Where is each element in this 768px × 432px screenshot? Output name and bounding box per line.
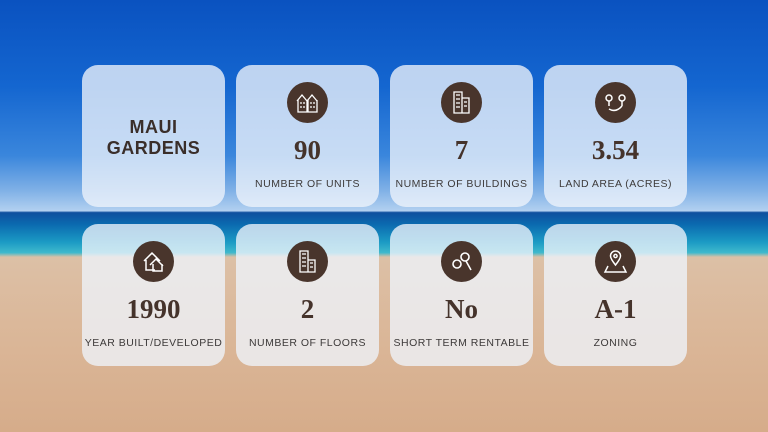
card: land area — [544, 65, 687, 207]
icon: map pins — [595, 82, 636, 123]
card: short term rentable — [390, 224, 533, 366]
title — [107, 117, 200, 158]
title: MAUI — [130, 117, 178, 137]
label: ZONING — [594, 337, 637, 349]
number: 1990 — [126, 294, 180, 324]
number: 2 — [301, 294, 314, 324]
label: YEAR BUILT/DEVELOPED — [85, 337, 222, 349]
card: zoning — [544, 224, 687, 366]
icon: buildings — [441, 82, 482, 123]
icon: map pin — [595, 241, 636, 282]
number: A-1 — [594, 294, 636, 324]
title: GARDENS — [107, 138, 200, 158]
label: LAND AREA (ACRES) — [559, 178, 672, 190]
card: title — [82, 65, 225, 207]
label: SHORT TERM RENTABLE — [394, 337, 529, 349]
card: year built — [82, 224, 225, 366]
number: No — [445, 294, 478, 324]
card: floors — [236, 224, 379, 366]
number: 7 — [455, 135, 468, 165]
label: NUMBER OF BUILDINGS — [395, 178, 528, 190]
number: 90 — [294, 135, 321, 165]
icon: building — [287, 241, 328, 282]
icon: house — [133, 241, 174, 282]
card: units — [236, 65, 379, 207]
number: 3.54 — [592, 135, 639, 165]
icon: houses — [287, 82, 328, 123]
label: NUMBER OF UNITS — [255, 178, 360, 190]
label: NUMBER OF FLOORS — [249, 337, 366, 349]
icon: keys — [441, 241, 482, 282]
card: buildings — [390, 65, 533, 207]
